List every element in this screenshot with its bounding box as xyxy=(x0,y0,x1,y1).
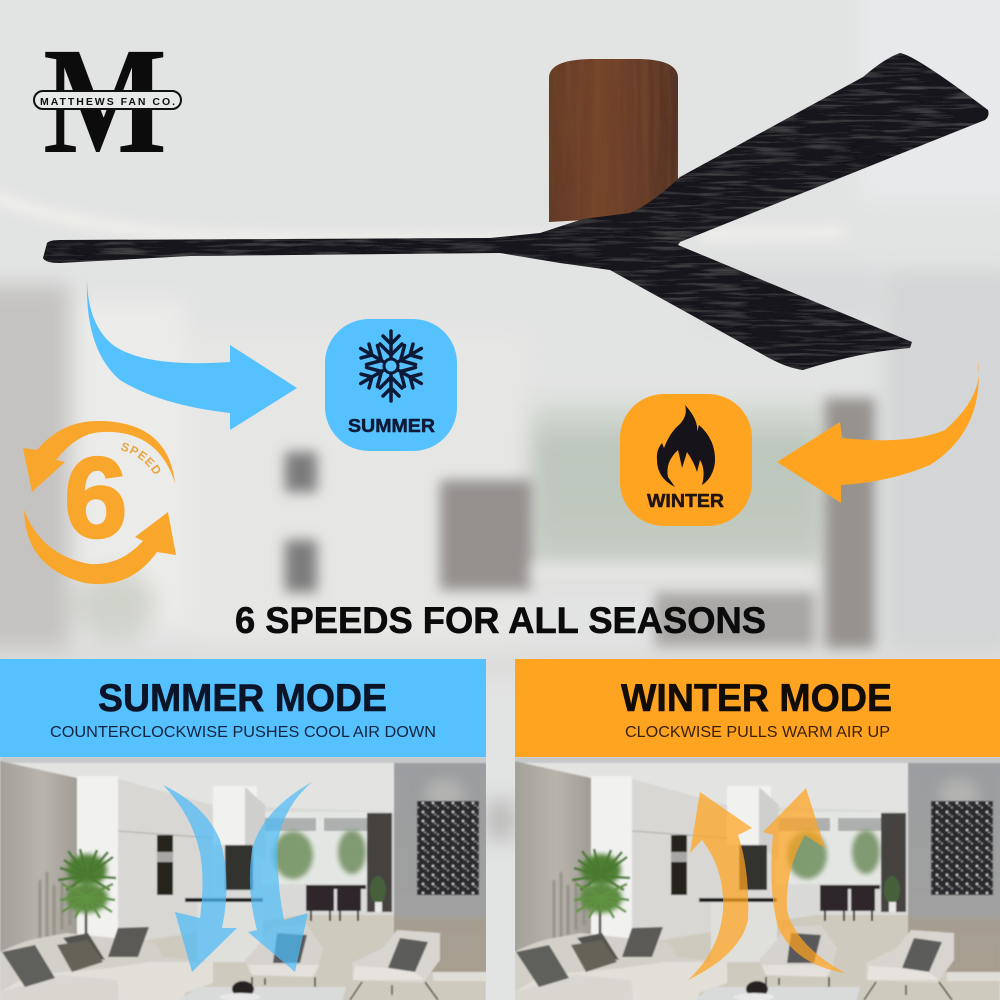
airflow arrows up xyxy=(688,788,845,980)
ceiling fan xyxy=(43,53,989,370)
icon: winter badge xyxy=(620,394,752,526)
room photo: summer xyxy=(0,755,488,1000)
panel: summer mode: COUNTERCLOCKWISE PUSHES COOL AIR DOWN xyxy=(50,724,436,741)
airflow arrows down xyxy=(163,782,312,972)
fan motor housing xyxy=(549,59,678,222)
icon: summer badge: SUMMER xyxy=(348,415,435,436)
speed label: SPEED xyxy=(121,442,160,474)
panel: summer mode xyxy=(0,659,486,757)
panel: winter mode xyxy=(515,659,1000,757)
panel: winter mode: CLOCKWISE PULLS WARM AIR UP xyxy=(625,724,890,741)
numeral 6: 6 xyxy=(64,435,127,562)
icon: snowflake xyxy=(355,331,427,401)
arrow: summer blue xyxy=(87,280,297,430)
panel: winter mode: WINTER MODE xyxy=(621,677,892,720)
heading: 6 SPEEDS FOR ALL SEASONS xyxy=(235,600,766,641)
panel: summer mode: SUMMER MODE xyxy=(98,677,387,720)
room photo: winter xyxy=(512,755,1000,1000)
icon: flame xyxy=(657,405,715,487)
arrow: winter orange xyxy=(777,360,979,503)
icon: summer badge xyxy=(325,319,457,451)
top circular arrow xyxy=(23,421,175,492)
logo: Matthews Fan Co.: MATTHEWS FAN CO. xyxy=(40,96,175,108)
bottom circular arrow xyxy=(24,510,176,584)
fan blades xyxy=(43,53,989,370)
logo: Matthews Fan Co.: M xyxy=(43,17,167,186)
icon: 6 speed xyxy=(23,421,176,584)
icon: winter badge: WINTER xyxy=(647,490,724,511)
